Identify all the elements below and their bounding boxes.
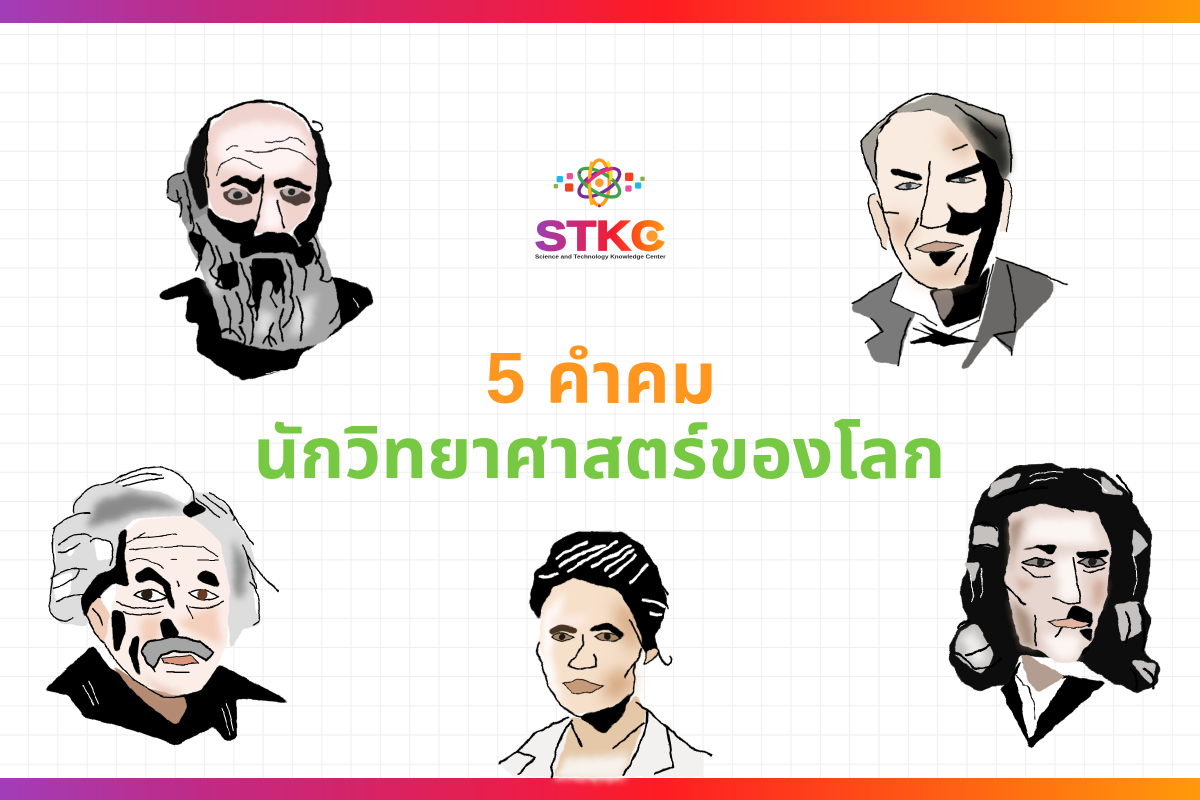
Darwin beard: [185, 213, 342, 352]
Einstein left brow: [135, 567, 177, 615]
Edison left ear: [868, 194, 890, 250]
Edison right coat: [959, 258, 1053, 370]
Einstein hair shadow: [87, 492, 247, 598]
Edison nose shadow: [938, 192, 991, 236]
Newton left brow: [1016, 545, 1058, 556]
Edison pupils: [905, 177, 965, 189]
Edison face right shadow: [963, 147, 1005, 287]
Darwin right brow: [273, 177, 312, 193]
Darwin left hair: [166, 118, 212, 250]
Darwin coat highlight: [267, 298, 358, 373]
Edison hair: [860, 93, 1012, 190]
Edison right brow: [945, 162, 984, 183]
portrait: Curie, bottom centre: [500, 532, 712, 780]
top gradient bar: [0, 0, 1200, 22]
Curie left face highlight: [542, 590, 572, 713]
Darwin left eye: [228, 189, 247, 199]
Einstein nose: [159, 618, 181, 639]
Newton chin shadow: [1073, 627, 1094, 663]
title line 1: 5 คำคม: [486, 339, 716, 419]
Einstein wavy hair clump: [80, 527, 129, 622]
portrait: Newton, bottom right: [948, 463, 1160, 749]
logo: STKC: [535, 160, 667, 260]
Newton right shade: [1013, 578, 1107, 608]
Einstein lips: [162, 655, 198, 665]
Newton nose: [1053, 558, 1080, 604]
Einstein ear: [85, 597, 110, 643]
Einstein chin shade: [140, 675, 187, 695]
Darwin face: [205, 102, 317, 233]
Edison lip shadow: [926, 250, 959, 268]
Edison neck shadow: [928, 262, 992, 328]
Edison right eye: [948, 177, 975, 183]
portrait: Edison, top right: [852, 93, 1067, 370]
logo tagline: Science and Technology Knowledge Center: [535, 254, 667, 260]
logo atom core: [595, 178, 604, 187]
Curie neck light: [555, 753, 630, 780]
Darwin beard curls: [193, 223, 339, 347]
Darwin right hair: [310, 127, 332, 237]
Darwin beard dark clumps: [187, 230, 315, 320]
Curie neck: [553, 693, 647, 777]
Darwin side hair strokes: [167, 120, 330, 237]
logo orange dot: [646, 230, 658, 242]
Edison bow tie: [910, 322, 980, 347]
Edison right ear: [999, 180, 1012, 232]
Darwin pupils: [234, 188, 295, 198]
Curie cheek shade: [603, 597, 640, 703]
Darwin coat: [158, 277, 374, 381]
Einstein cheek black shadow: [112, 610, 143, 682]
Curie hair tail: [658, 587, 672, 665]
Curie hair: [528, 532, 667, 660]
Edison neck tone: [932, 289, 955, 323]
Einstein hair light patches: [53, 538, 113, 602]
Edison nasolabial lines: [905, 218, 967, 275]
Curie left brow: [548, 624, 577, 636]
Edison left coat: [852, 273, 916, 365]
Einstein under-eye lines: [117, 582, 223, 672]
Einstein hair strokes: [50, 467, 278, 625]
Curie hair highlights: [540, 542, 663, 615]
Edison shirt collar: [890, 265, 993, 335]
Einstein right iris: [197, 590, 208, 600]
Newton right eye: [1078, 558, 1107, 567]
Curie under-jaw shadow: [578, 690, 633, 735]
Curie left eye: [552, 633, 573, 641]
logo wordmark: STKC: [535, 212, 665, 259]
Darwin nose light: [260, 193, 283, 232]
Darwin left brow: [217, 173, 264, 195]
Darwin right eye: [282, 187, 301, 196]
Einstein coat highlights: [83, 682, 233, 735]
Edison face outline: [878, 145, 967, 289]
Newton hair: [948, 463, 1160, 693]
Darwin head outline: [200, 101, 313, 133]
Newton neck: [1021, 652, 1067, 693]
Einstein cheek tone: [140, 605, 222, 645]
Curie ear: [644, 647, 658, 664]
Edison nose: [920, 162, 953, 228]
Newton left cheek shade: [1010, 518, 1037, 648]
Darwin left socket: [222, 188, 253, 206]
Curie collar lines: [500, 702, 712, 777]
Curie jaw outline: [537, 620, 647, 717]
Darwin right socket: [278, 187, 310, 205]
Edison coat lines: [853, 258, 1067, 365]
Edison left brow: [890, 168, 924, 182]
Edison cheek tone: [887, 122, 973, 285]
Curie nose: [568, 635, 596, 669]
Curie lips: [563, 679, 603, 693]
Newton left eye: [1023, 558, 1054, 567]
Darwin nose lines: [255, 175, 283, 230]
Darwin beard highlights: [203, 267, 317, 337]
Curie face: [540, 578, 645, 713]
logo atom icon: [575, 160, 624, 205]
Edison left eye: [895, 183, 922, 190]
Einstein left eye: [135, 590, 167, 601]
bottom gradient bar: [0, 778, 1200, 800]
Einstein moustache: [142, 637, 213, 668]
Newton hair light top-up: [960, 632, 988, 663]
Einstein face: [105, 515, 230, 696]
Einstein forehead lines: [127, 533, 218, 568]
Newton face: [1005, 503, 1112, 663]
Newton nose and mouth shadow: [1063, 605, 1093, 630]
portrait: Darwin, top left: [158, 101, 374, 381]
Newton hair dark waves: [953, 475, 1154, 688]
Edison right ear line: [1003, 180, 1012, 232]
Newton eye socket lines: [1005, 507, 1105, 645]
Newton right brow: [1073, 550, 1110, 558]
Darwin forehead light: [216, 122, 310, 177]
Einstein left iris: [142, 589, 153, 600]
Curie pupils: [559, 633, 611, 640]
Curie blouse: [500, 703, 703, 777]
Darwin forehead wrinkles: [217, 137, 315, 175]
Edison lips: [915, 241, 963, 253]
Einstein hair: [50, 467, 260, 652]
Newton shirt ruffle: [1016, 675, 1035, 718]
Einstein right eye: [188, 590, 218, 600]
Newton pupils: [1036, 558, 1097, 567]
Edison collar lines: [890, 265, 993, 338]
Edison hair shadow: [963, 115, 1010, 182]
Darwin cheek shadow and moustache: [207, 203, 303, 260]
Curie right eye: [595, 633, 622, 641]
Curie right brow: [588, 622, 626, 639]
Einstein chin line: [105, 645, 200, 697]
Newton coat: [1000, 662, 1107, 749]
Edison hair outline: [861, 93, 1011, 190]
Edison left ear line: [868, 193, 887, 250]
Einstein coat: [43, 645, 293, 746]
Darwin right cheek shadow: [292, 203, 323, 247]
Curie forehead pink: [550, 613, 590, 627]
Newton forehead light: [1023, 518, 1098, 660]
title line 2: นักวิทยาศาสตร์ของโลก: [254, 414, 945, 494]
Einstein ear line: [85, 597, 105, 643]
Einstein neck: [105, 660, 187, 726]
Einstein bald dome: [115, 468, 193, 505]
Einstein right brow: [196, 570, 221, 588]
Edison face: [877, 110, 1000, 290]
logo dots: [554, 171, 645, 207]
Newton lips: [1048, 618, 1092, 628]
Newton white hair streaks: [970, 471, 1137, 602]
Einstein hair tuft: [182, 500, 208, 518]
Darwin left hair dark: [187, 120, 211, 210]
portrait: Einstein, bottom left: [43, 467, 293, 746]
Newton hair gray highlights: [955, 472, 1157, 687]
Newton shirt: [1015, 662, 1067, 738]
